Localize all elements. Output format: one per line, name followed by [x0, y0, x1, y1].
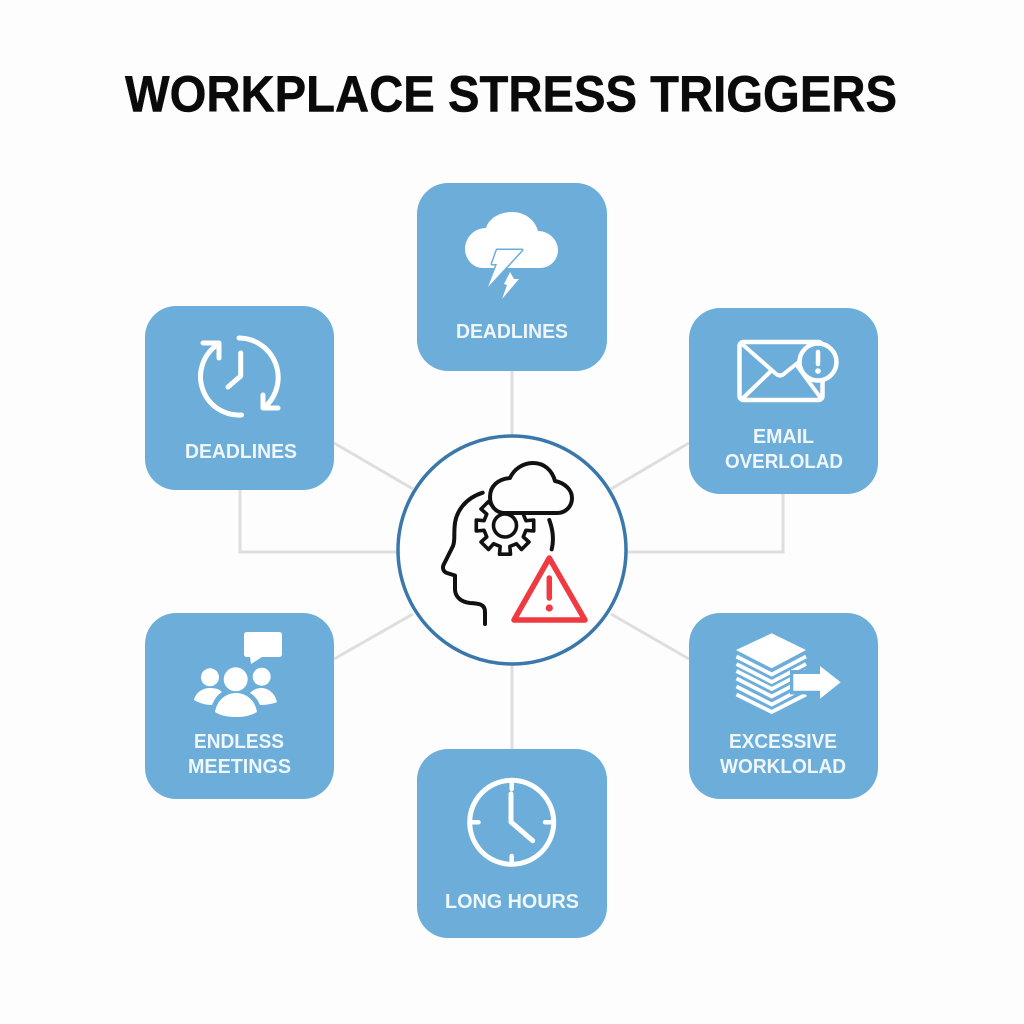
icon: storm cloud	[465, 212, 558, 299]
label: email overload: OVERLOLAD	[725, 451, 843, 473]
label: deadlines: DEADLINES	[456, 321, 568, 343]
panel: excessive workload	[689, 613, 878, 799]
icon: envelope with alert	[740, 342, 836, 400]
label: excessive workload: WORKLOLAD	[720, 756, 846, 778]
label: excessive workload	[720, 731, 846, 778]
label: excessive workload: EXCESSIVE	[729, 731, 837, 753]
icon: people with speech bubble	[194, 632, 282, 717]
label: long hours: LONG HOURS	[445, 891, 579, 913]
panel: long hours	[417, 749, 607, 938]
panel: email overload	[689, 308, 878, 494]
icon: paper stack with arrow	[736, 633, 846, 712]
icon: cloud	[490, 463, 572, 513]
icon: clock	[470, 780, 554, 864]
center circle	[398, 436, 626, 664]
label: email overload: EMAIL	[753, 426, 814, 448]
title: WORKPLACE STRESS TRIGGERS	[125, 66, 897, 122]
label: deadlines: DEADLINES	[185, 441, 297, 463]
panel: top deadlines	[417, 183, 607, 371]
label: endless meetings: ENDLESS	[194, 731, 284, 753]
icon: gear	[476, 497, 534, 554]
label: endless meetings	[188, 731, 291, 778]
connector lines	[240, 371, 783, 749]
panel: left deadlines	[145, 306, 334, 490]
icon: head silhouette	[443, 493, 553, 624]
panel: endless meetings	[145, 613, 334, 799]
label: email overload	[725, 426, 843, 473]
label: endless meetings: MEETINGS	[188, 756, 291, 778]
icon: warning triangle	[514, 558, 585, 620]
icon: clock with circular arrows	[201, 338, 278, 415]
